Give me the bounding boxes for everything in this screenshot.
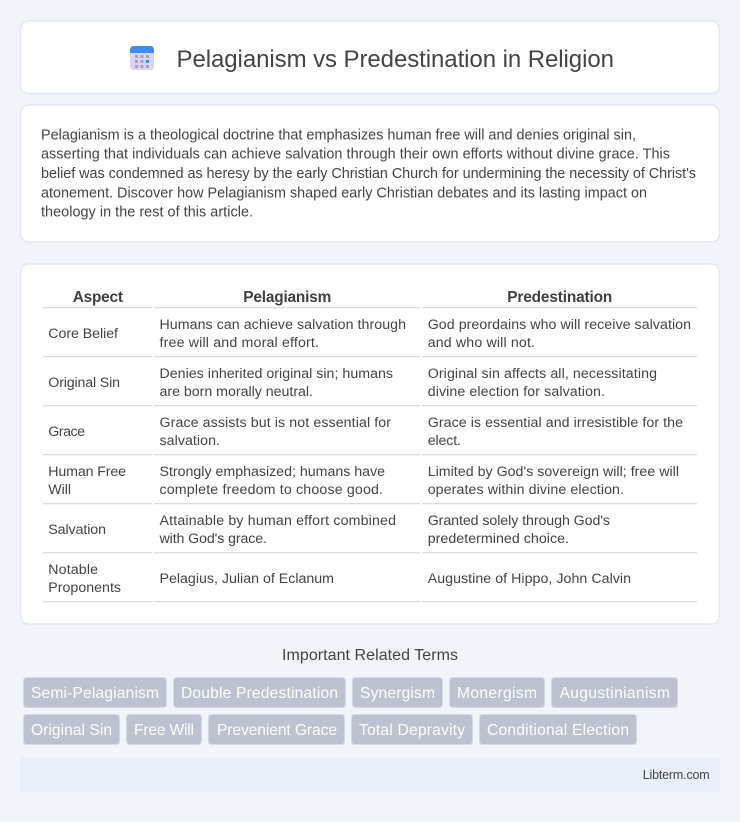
row: original sin: Denies inherited original sin; humans <box>160 366 393 382</box>
tag: Total Depravity <box>352 714 472 744</box>
row: human free will <box>43 464 697 504</box>
intro paragraph: Pelagianism is a theological doctrine that emphasizes human free will and denies original sin, <box>41 127 636 143</box>
tag: Synergism: Synergism <box>360 685 435 702</box>
row: original sin: divine election for salvation. <box>428 384 605 400</box>
intro paragraph: asserting that individuals can achieve salvation through their own efforts without divine grace. This <box>41 147 670 163</box>
table header row <box>43 289 697 308</box>
row: human free will: complete freedom to choose good. <box>160 482 383 498</box>
header panel <box>20 21 720 94</box>
row: human free will: Strongly emphasized; humans have <box>160 464 385 480</box>
row: grace: elect. <box>428 433 461 449</box>
row: grace: Grace is essential and irresistible for the <box>428 415 683 431</box>
tag: Double Predestination: Double Predestination <box>181 685 338 702</box>
tag: Monergism: Monergism <box>457 685 537 702</box>
row: original sin: are born morally neutral. <box>160 384 313 400</box>
row: salvation: Salvation <box>48 522 106 538</box>
title: Pelagianism vs Predestination in Religion <box>176 46 614 73</box>
tag: Monergism <box>450 678 544 708</box>
row: core belief: Humans can achieve salvation through <box>160 317 406 333</box>
row: original sin: Original Sin <box>48 375 120 391</box>
tag: Synergism <box>352 678 442 708</box>
row: grace: Grace assists but is not essential for <box>160 415 391 431</box>
tag: Free Will: Free Will <box>134 722 194 739</box>
intro paragraph: belief was condemned as heresy by the early Christian Church for undermining the necessity of Christ's <box>41 166 696 182</box>
row: notable proponents <box>43 562 697 602</box>
row: core belief: God preordains who will receive salvation <box>428 317 691 333</box>
row: notable proponents: Notable <box>48 562 98 578</box>
comparison table panel <box>20 264 720 624</box>
row: grace <box>43 415 697 455</box>
intro paragraph: theology in the rest of this article. <box>41 205 253 221</box>
row: core belief: free will and moral effort. <box>160 335 319 351</box>
tag: Free Will <box>126 714 202 744</box>
row: original sin <box>43 366 697 406</box>
row: core belief: and who will not. <box>428 335 535 351</box>
tag: Conditional Election: Conditional Election <box>487 722 629 739</box>
tag: Total Depravity: Total Depravity <box>359 722 465 739</box>
tag: Conditional Election <box>480 714 636 744</box>
row: notable proponents: Augustine of Hippo, John Calvin <box>428 571 631 587</box>
row: notable proponents: Pelagius, Julian of Eclanum <box>160 571 334 587</box>
row: grace: Grace <box>48 424 85 440</box>
tag: Semi-Pelagianism <box>24 678 166 708</box>
row: human free will: operates within divine election. <box>428 482 624 498</box>
tag: Augustinianism <box>552 678 678 708</box>
related terms heading: Important Related Terms <box>282 647 458 664</box>
row: salvation: Attainable by human effort combined <box>160 513 396 529</box>
row: human free will: Will <box>48 482 71 498</box>
row: original sin: Original sin affects all, necessitating <box>428 366 657 382</box>
table header row: Aspect <box>73 289 123 306</box>
table header row: Pelagianism <box>243 289 331 306</box>
row: salvation: with God's grace. <box>158 531 267 547</box>
tag: Prevenient Grace <box>208 714 344 744</box>
row: notable proponents: Proponents <box>48 580 121 596</box>
footer credit: Libterm.com <box>643 768 710 782</box>
tag: Augustinianism: Augustinianism <box>560 685 670 702</box>
row: human free will: Human Free <box>48 464 126 480</box>
row: salvation: Granted solely through God's <box>428 513 610 529</box>
intro text panel <box>20 105 720 242</box>
tag: Original Sin <box>24 714 120 744</box>
footer bar <box>20 758 720 792</box>
row: core belief: Core Belief <box>48 326 118 342</box>
tag: Prevenient Grace: Prevenient Grace <box>217 722 337 739</box>
tag: Semi-Pelagianism: Semi-Pelagianism <box>31 685 159 702</box>
table header row: Predestination <box>507 289 612 306</box>
icon: calendar <box>130 46 154 70</box>
intro paragraph: atonement. Discover how Pelagianism shaped early Christian debates and its lasting impact on <box>41 185 647 201</box>
row: human free will: Limited by God's sovereign will; free will <box>428 464 679 480</box>
row: core belief <box>43 317 697 357</box>
row: salvation: predetermined choice. <box>428 531 569 547</box>
intro paragraph <box>41 127 696 221</box>
tag: Double Predestination <box>174 678 346 708</box>
row: grace: salvation. <box>160 433 220 449</box>
row: salvation <box>43 513 697 553</box>
related terms tags <box>24 678 678 744</box>
tag: Original Sin: Original Sin <box>31 722 112 739</box>
